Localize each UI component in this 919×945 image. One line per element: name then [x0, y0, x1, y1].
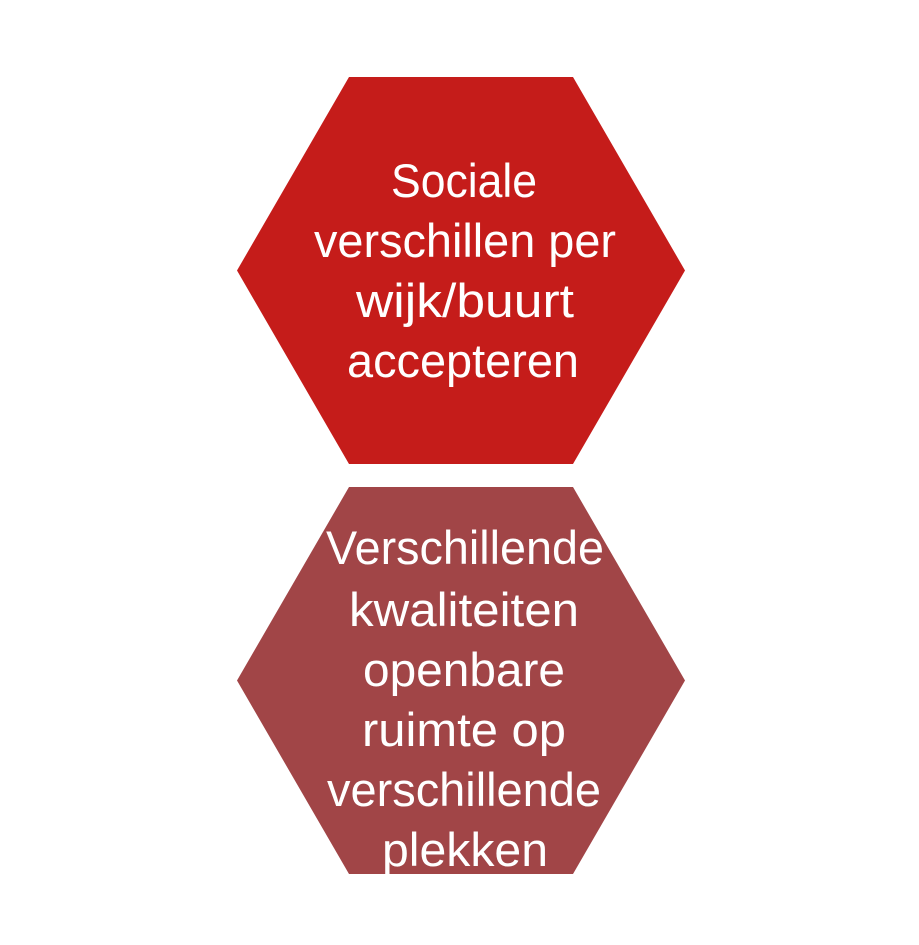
text: public space qualities: [326, 521, 604, 876]
text: social differences: wijk/buurt: [355, 274, 574, 327]
text: social differences: [314, 154, 616, 387]
text: public space qualities: kwaliteiten: [349, 583, 579, 636]
text: public space qualities: openbare: [363, 643, 565, 696]
text: social differences: Sociale: [391, 154, 537, 207]
text: social differences: accepteren: [347, 334, 579, 387]
text: public space qualities: Verschillende: [326, 521, 604, 574]
text: public space qualities: ruimte op: [362, 703, 566, 756]
text: public space qualities: verschillende: [327, 763, 601, 816]
text: public space qualities: plekken: [382, 823, 548, 876]
text: social differences: verschillen per: [314, 214, 616, 267]
panel: top hexagon: [237, 77, 685, 464]
panel: bottom hexagon: [237, 487, 685, 876]
